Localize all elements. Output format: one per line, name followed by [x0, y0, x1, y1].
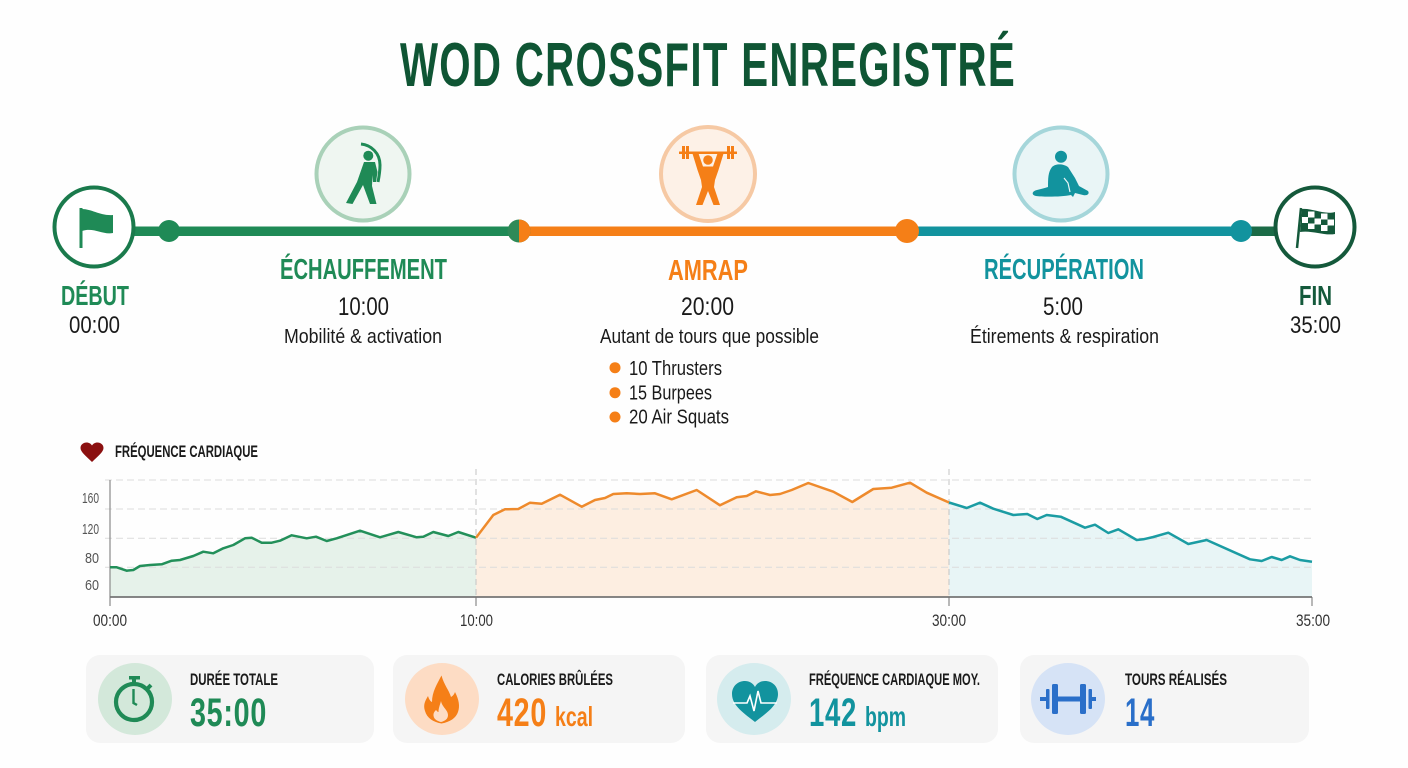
- unit: bpm: [865, 701, 906, 732]
- y axis labels: 120: [82, 521, 99, 538]
- title: WOD CROSSFIT ENREGISTRÉ: [400, 31, 1016, 100]
- icon: heart: [80, 442, 104, 462]
- end marker: [1276, 188, 1354, 339]
- x axis labels: [93, 611, 1330, 630]
- node: recovery end: [1230, 220, 1252, 242]
- timeline bar: end connector: [1241, 226, 1279, 236]
- icon: heart with pulse: [717, 663, 791, 735]
- timeline bar: AMRAP segment: [519, 226, 907, 236]
- warm-up description: Mobilité & activation: [284, 326, 442, 348]
- exercise list: [610, 358, 729, 429]
- start time: 00:00: [69, 312, 120, 339]
- unit: kcal: [555, 701, 593, 732]
- line: warm-up: [110, 531, 476, 571]
- x axis labels: 00:00: [93, 611, 127, 630]
- end time: 35:00: [1290, 312, 1341, 339]
- AMRAP heading: AMRAP: [668, 255, 748, 287]
- AMRAP duration: 20:00: [681, 293, 734, 321]
- label: FRÉQUENCE CARDIAQUE MOY.: [809, 670, 980, 689]
- stat card: average heart rate: [706, 655, 998, 743]
- recovery heading: RÉCUPÉRATION: [984, 252, 1144, 286]
- y axis labels: [82, 490, 99, 594]
- AMRAP description: Autant de tours que possible: [600, 326, 819, 348]
- x axis labels: 10:00: [460, 611, 493, 630]
- value: 420: [497, 691, 547, 735]
- icon: flame: [405, 663, 479, 735]
- node: warm-up to AMRAP: [508, 220, 530, 242]
- icon: start flag: [54, 188, 134, 266]
- timeline bar: warm-up segment: [169, 226, 519, 236]
- recovery duration: 5:00: [1043, 293, 1083, 321]
- stat card: total duration: [86, 655, 374, 743]
- phase: AMRAP: [600, 127, 819, 429]
- label: CALORIES BRÛLÉES: [497, 670, 613, 689]
- area: warm-up: [110, 531, 476, 597]
- line: recovery: [949, 502, 1312, 562]
- exercise list: 10 Thrusters: [629, 358, 722, 380]
- chart heading: FRÉQUENCE CARDIAQUE: [115, 442, 258, 461]
- warm-up duration: 10:00: [338, 293, 389, 321]
- start marker: [54, 188, 134, 339]
- timeline bar: recovery segment: [907, 226, 1241, 236]
- x axis labels: 35:00: [1296, 611, 1330, 630]
- icon: dumbbell: [1031, 663, 1105, 735]
- recovery description: Étirements & respiration: [970, 325, 1159, 348]
- start label: DÉBUT: [61, 280, 129, 311]
- y axis labels: 60: [85, 577, 99, 594]
- node: warm-up start: [158, 220, 180, 242]
- label: DURÉE TOTALE: [190, 670, 278, 689]
- stat card: calories: [393, 655, 685, 743]
- phase: recovery: [970, 128, 1159, 348]
- value: 35:00: [190, 691, 267, 735]
- icon: checkered flag: [1276, 188, 1354, 266]
- timeline: [130, 219, 1279, 243]
- icon: stretching figure: [316, 128, 410, 220]
- icon: weightlifter: [661, 127, 755, 221]
- value: 14: [1125, 691, 1155, 735]
- stat card: rounds: [1020, 655, 1309, 743]
- exercise list: 15 Burpees: [629, 382, 712, 404]
- area: recovery: [949, 502, 1312, 597]
- x axis labels: 30:00: [932, 611, 966, 630]
- warm-up heading: ÉCHAUFFEMENT: [280, 252, 447, 286]
- heart rate chart: [80, 442, 1330, 630]
- timeline bar: start connector: [130, 226, 170, 236]
- y axis labels: 160: [82, 490, 99, 507]
- area: AMRAP: [476, 483, 949, 597]
- end label: FIN: [1299, 280, 1332, 311]
- icon: stopwatch: [98, 663, 172, 735]
- node: AMRAP to recovery: [895, 219, 919, 243]
- value: 142: [809, 691, 857, 735]
- exercise list: 20 Air Squats: [629, 407, 729, 429]
- label: TOURS RÉALISÉS: [1125, 670, 1227, 689]
- icon: seated stretch: [1014, 128, 1108, 220]
- line: AMRAP: [476, 483, 949, 538]
- y axis labels: 80: [85, 550, 99, 567]
- phase: warm-up: [280, 128, 447, 348]
